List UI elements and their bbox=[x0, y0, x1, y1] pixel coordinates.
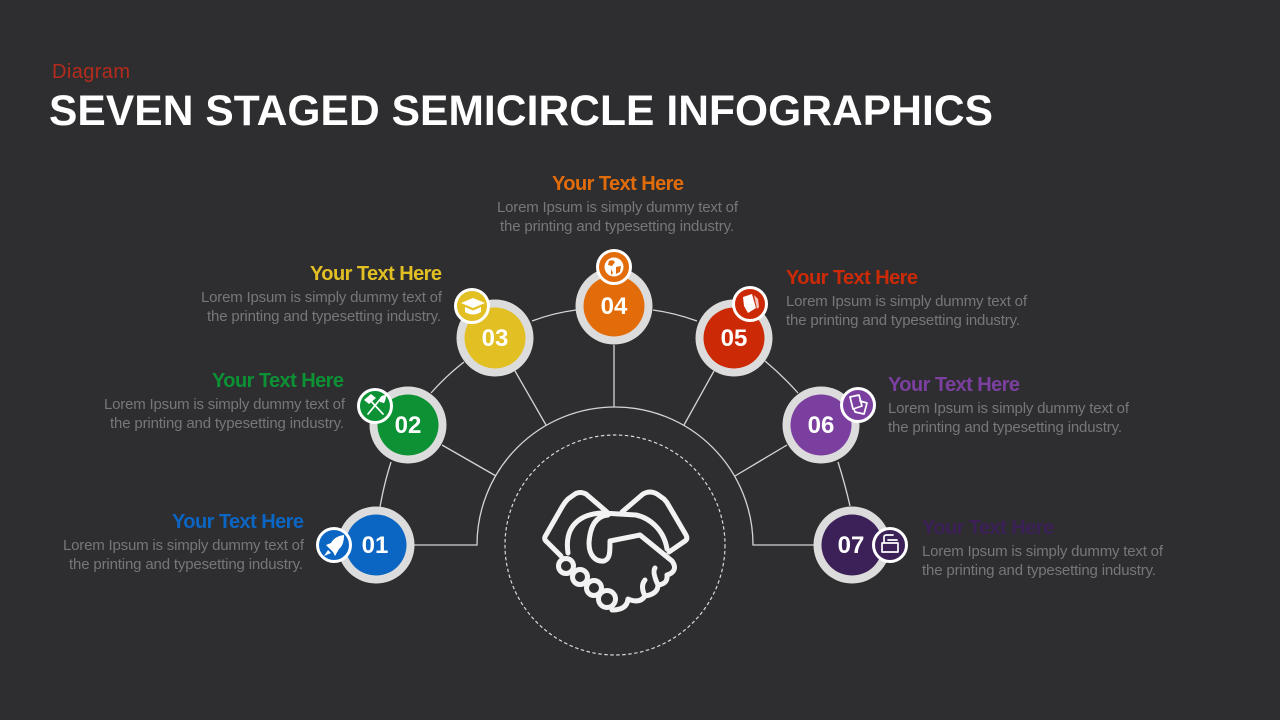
stage 01 bbox=[63, 506, 414, 584]
stage 07: 07 bbox=[838, 532, 864, 559]
icon: rocket bbox=[318, 528, 350, 562]
heading 07: Your Text Here bbox=[922, 517, 1054, 539]
body 01: the printing and typesetting industry. bbox=[69, 556, 303, 573]
heading 06: Your Text Here bbox=[888, 374, 1020, 396]
body 05: the printing and typesetting industry. bbox=[786, 312, 1020, 329]
body 02: Lorem Ipsum is simply dummy text of bbox=[104, 396, 346, 413]
heading 03: Your Text Here bbox=[310, 263, 442, 285]
node 07 bbox=[814, 506, 890, 584]
body 01 bbox=[63, 537, 305, 573]
title: SEVEN STAGED SEMICIRCLE INFOGRAPHICS bbox=[49, 88, 993, 135]
body 02 bbox=[104, 396, 346, 432]
stage 01: 01 bbox=[362, 532, 388, 559]
node 06 bbox=[782, 386, 860, 464]
eyebrow: Diagram: Diagram bbox=[52, 61, 130, 83]
body 01: Lorem Ipsum is simply dummy text of bbox=[63, 537, 305, 554]
node 05 bbox=[696, 300, 772, 376]
stage 02 bbox=[104, 370, 446, 464]
heading 04: Your Text Here bbox=[552, 173, 684, 195]
body 07 bbox=[922, 543, 1164, 579]
stage 06: 06 bbox=[808, 412, 834, 439]
stage 03: 03 bbox=[482, 325, 508, 352]
node 03 bbox=[456, 300, 534, 376]
stage 03 bbox=[201, 263, 534, 376]
body 03: Lorem Ipsum is simply dummy text of bbox=[201, 289, 443, 306]
stage 02: 02 bbox=[395, 412, 421, 439]
body 05: Lorem Ipsum is simply dummy text of bbox=[786, 293, 1028, 310]
stage 07 bbox=[814, 506, 1164, 584]
node 02 bbox=[370, 386, 446, 464]
dashed inner circle bbox=[505, 435, 725, 655]
icon: photos bbox=[842, 388, 874, 422]
icon: folder bbox=[874, 528, 906, 562]
body 04 bbox=[497, 199, 739, 235]
stage 04: 04 bbox=[601, 293, 628, 320]
body 06: the printing and typesetting industry. bbox=[888, 419, 1122, 436]
heading 05: Your Text Here bbox=[786, 267, 918, 289]
stage 06 bbox=[782, 374, 1130, 464]
icon: globe bbox=[598, 250, 630, 284]
body 07: Lorem Ipsum is simply dummy text of bbox=[922, 543, 1164, 560]
connector network bbox=[380, 310, 850, 545]
body 03 bbox=[201, 289, 443, 325]
node 01 bbox=[338, 506, 414, 584]
body 07: the printing and typesetting industry. bbox=[922, 562, 1156, 579]
node 04 bbox=[576, 268, 652, 344]
icon: handshake bbox=[545, 492, 687, 610]
body 06: Lorem Ipsum is simply dummy text of bbox=[888, 400, 1130, 417]
body 05 bbox=[786, 293, 1028, 329]
heading 02: Your Text Here bbox=[212, 370, 344, 392]
body 02: the printing and typesetting industry. bbox=[110, 415, 344, 432]
stage 05: 05 bbox=[721, 325, 747, 352]
icon: tools bbox=[358, 390, 392, 422]
heading 01: Your Text Here bbox=[172, 511, 304, 533]
stage 05 bbox=[696, 267, 1028, 376]
body 03: the printing and typesetting industry. bbox=[207, 308, 441, 325]
body 04: the printing and typesetting industry. bbox=[500, 218, 734, 235]
body 04: Lorem Ipsum is simply dummy text of bbox=[497, 199, 739, 216]
icon: graduation cap bbox=[456, 290, 488, 322]
body 06 bbox=[888, 400, 1130, 436]
stage 04 bbox=[497, 173, 739, 344]
icon: book bbox=[734, 288, 766, 320]
